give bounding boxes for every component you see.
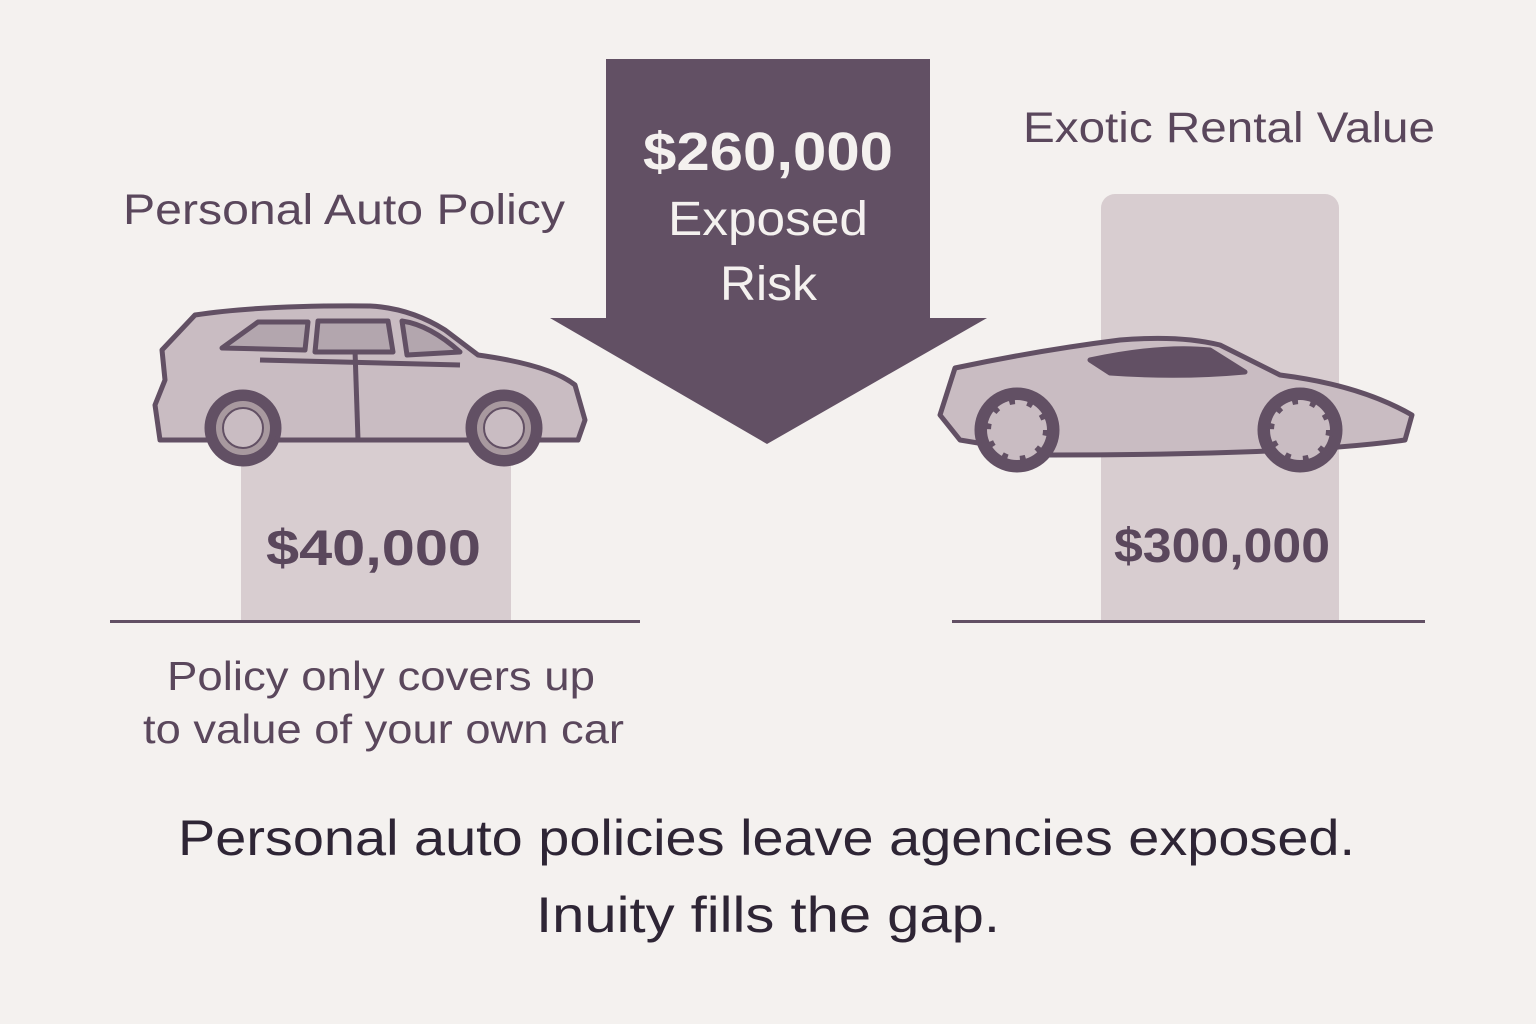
- arrow: exposed risk: Exposed: [668, 193, 868, 246]
- arrow: exposed risk: $260,000: [643, 122, 893, 182]
- baseline right: [952, 620, 1425, 623]
- caption: policy note: [143, 653, 624, 752]
- footer message: Personal auto policies leave agencies exposed.: [178, 810, 1355, 866]
- baseline left: [110, 620, 640, 623]
- heading: exotic rental value: Exotic Rental Value: [1023, 104, 1435, 152]
- arrow: exposed risk: Risk: [720, 258, 818, 311]
- value label: $40,000: $40,000: [266, 520, 481, 576]
- value label: $300,000: $300,000: [1114, 520, 1330, 573]
- bar: exotic rental value: [1101, 194, 1339, 621]
- icon: sports car: [940, 338, 1412, 470]
- caption: policy note: to value of your own car: [143, 706, 624, 752]
- icon: SUV: [155, 306, 585, 464]
- heading: personal auto policy: Personal Auto Policy: [123, 186, 566, 234]
- caption: policy note: Policy only covers up: [167, 653, 595, 699]
- bar: personal policy value: [241, 440, 511, 621]
- footer message: Inuity fills the gap.: [536, 887, 1000, 943]
- footer message: [178, 810, 1355, 943]
- arrow: exposed risk: [550, 59, 987, 444]
